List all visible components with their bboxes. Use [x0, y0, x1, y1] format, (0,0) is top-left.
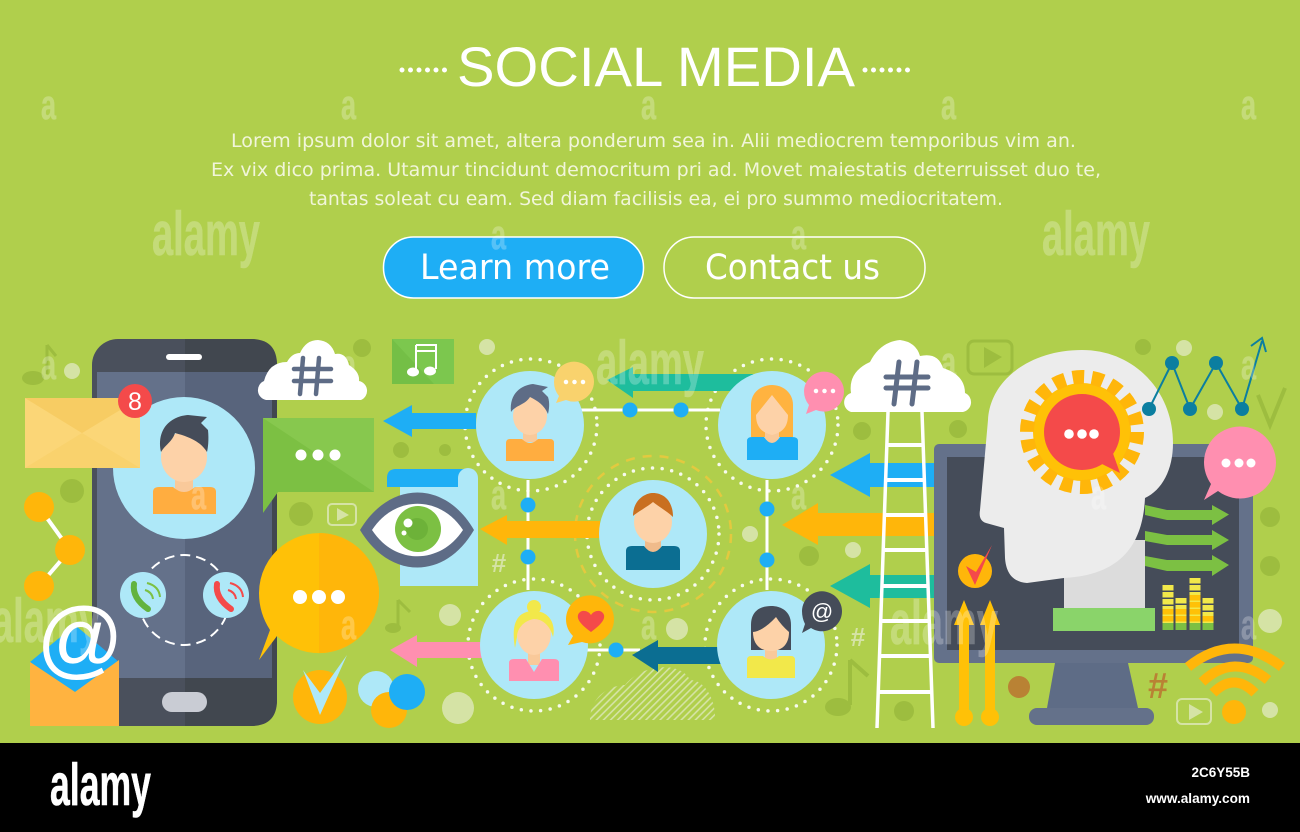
- button: learn more: Learn more: [420, 248, 610, 288]
- watermarks: a: [941, 81, 956, 128]
- person: center: [599, 480, 707, 588]
- arrow: right yellow: [782, 503, 934, 545]
- intro text block: Ex vix dico prima. Utamur tincidunt democritum pri ad. Movet maiestatis deterruisset duo te,: [211, 159, 1101, 181]
- arrow: pink: [390, 635, 482, 667]
- footer alamy logo: alamy: [50, 752, 151, 818]
- watermarks: a: [341, 601, 356, 648]
- human head with gear: [980, 350, 1173, 631]
- watermarks: a: [341, 341, 356, 388]
- watermarks: a: [341, 81, 356, 128]
- button: contact us: Contact us: [705, 248, 880, 288]
- checkmark badge: [293, 655, 347, 724]
- wifi icon: [1188, 648, 1282, 724]
- smartphone: [92, 339, 277, 726]
- call icon red: [203, 572, 249, 618]
- ladder: [877, 412, 933, 728]
- green chat bubble: [263, 418, 374, 513]
- connector lines: [520, 402, 774, 658]
- gear: [1027, 377, 1137, 487]
- bubble: heart: [566, 595, 614, 645]
- arrow: right blue: [830, 453, 934, 497]
- watermarks: a: [191, 471, 206, 518]
- watermarks: alamy: [1042, 200, 1150, 269]
- footer url: www.alamy.com: [1145, 791, 1250, 806]
- person: top left: [476, 371, 584, 479]
- footer image id: 2C6Y55B: [1191, 765, 1250, 780]
- check badge on monitor: [958, 545, 992, 588]
- watermarks: alamy: [596, 329, 704, 398]
- dashed call ring: [139, 555, 229, 645]
- dotted rings: [465, 359, 838, 711]
- arrow: teal top: [607, 367, 753, 398]
- intro text block: tantas soleat cu eam. Sed diam facilisis ea, ei pro summo mediocritatem.: [309, 188, 1003, 210]
- cloud hash right: [844, 340, 971, 412]
- brown hash: #: [1148, 665, 1168, 706]
- button: contact us: [664, 237, 925, 298]
- small hash: #: [492, 548, 507, 578]
- background decoration dots: [22, 339, 1285, 724]
- arrow: yellow center: [480, 515, 600, 545]
- green arrows: [1145, 505, 1229, 576]
- watermarks: alamy: [152, 200, 260, 269]
- person: top right: [718, 371, 826, 479]
- overlapping circles: [358, 671, 425, 728]
- person: bottom left: [480, 591, 588, 699]
- phone contact avatar: [113, 397, 255, 539]
- bubble: yellow small: [554, 362, 594, 403]
- arrow: right teal: [830, 564, 934, 608]
- document with eye: [360, 468, 478, 586]
- watermarks: a: [1241, 601, 1256, 648]
- watermarks: a: [1241, 341, 1256, 388]
- watermarks: alamy: [890, 589, 998, 658]
- watermarks: a: [41, 81, 56, 128]
- watermarks: a: [641, 601, 656, 648]
- watermarks: a: [491, 471, 506, 518]
- mail envelope with badge: [25, 384, 152, 468]
- line chart: [1142, 338, 1266, 416]
- watermarks: a: [491, 211, 506, 258]
- person: bottom right: [717, 591, 825, 699]
- watermarks: a: [41, 341, 56, 388]
- monitor: [934, 444, 1253, 725]
- intro text block: [211, 130, 1101, 210]
- watermarks: a: [1241, 81, 1256, 128]
- intro text block: Lorem ipsum dolor sit amet, altera ponderum sea in. Alii mediocrem temporibus vim an.: [231, 130, 1076, 152]
- small hash right: #: [851, 622, 866, 652]
- email at envelope: [30, 591, 124, 726]
- title: SOCIAL MEDIA: [457, 35, 856, 98]
- watermarks: a: [641, 81, 656, 128]
- arrow: blue left: [383, 405, 476, 437]
- email at envelope: @: [36, 591, 124, 687]
- button: learn more: [384, 237, 644, 298]
- bubble: at sign: [802, 591, 842, 633]
- equalizer: [1168, 578, 1208, 630]
- watermarks: a: [791, 471, 806, 518]
- up arrows: [954, 600, 1000, 726]
- bubble: at sign: @: [811, 599, 833, 624]
- watermarks: a: [1091, 471, 1106, 518]
- mail envelope with badge: 8: [128, 388, 142, 416]
- watermarks: a: [791, 211, 806, 258]
- pink chat bubble: [1204, 427, 1276, 500]
- watermarks: a: [941, 338, 956, 385]
- yellow chat bubble: [259, 533, 379, 660]
- call icon green: [120, 572, 166, 618]
- music note card: [392, 339, 454, 384]
- molecule network: [24, 492, 85, 601]
- cloud hash left: [258, 340, 367, 400]
- watermarks: [0, 81, 1256, 658]
- arrow: dark blue: [632, 640, 722, 672]
- bubble: pink small: [804, 372, 844, 414]
